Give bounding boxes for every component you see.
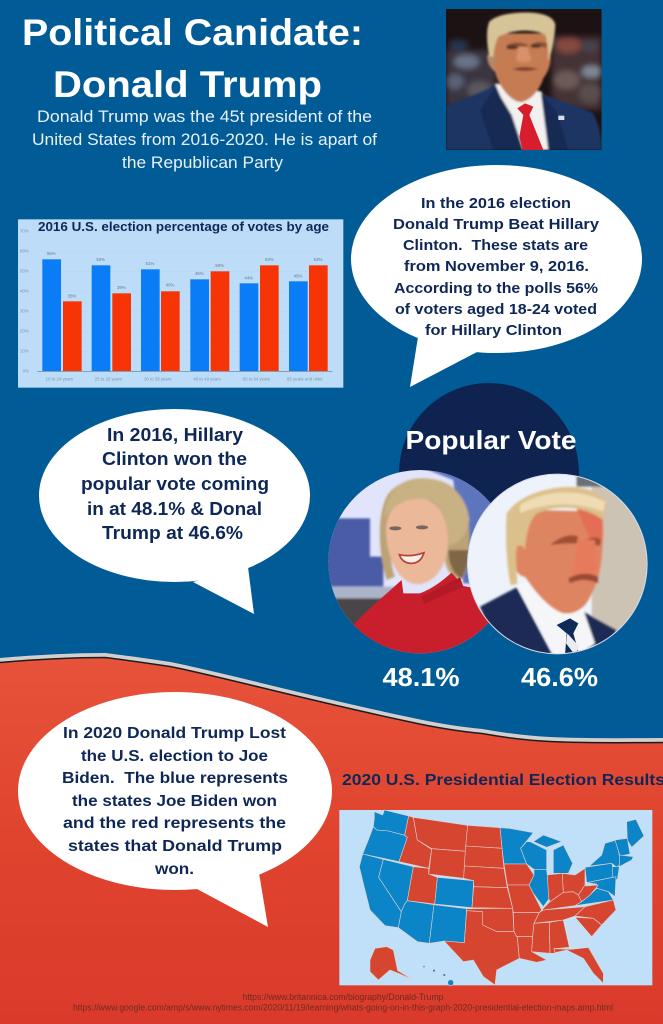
chart axis labels: 60% — [20, 249, 29, 254]
speech bubble: 2020 election: the U.S. election to Joe — [81, 748, 268, 765]
speech bubble: popular vote: In 2016, Hillary — [107, 425, 243, 445]
speech bubble: 2020 election: won. — [154, 861, 194, 878]
map title: 2020 U.S. Presidential Election Results — [342, 772, 663, 789]
speech bubble: 2016 election: from November 9, 2016. — [404, 258, 589, 275]
bar value labels: 50% — [215, 263, 224, 268]
title: Political Canidate: — [22, 12, 363, 53]
bar value labels: 44% — [244, 275, 253, 280]
speech bubble: 2016 election: According to the polls 56% — [394, 280, 598, 297]
speech bubble: 2016 election: for Hillary Clinton — [425, 322, 562, 339]
bar value labels: 39% — [117, 285, 126, 290]
Trump states — [370, 816, 616, 985]
chart axis labels: 30% — [20, 309, 29, 314]
photo: Hillary Clinton — [328, 470, 490, 654]
speech bubble: 2020 election: and the red represents the — [63, 815, 286, 832]
bar value labels: 53% — [96, 257, 105, 262]
photo: Donald Trump portrait — [446, 9, 602, 150]
chart title: 2016 U.S. election percentage of votes by age — [38, 219, 329, 234]
chart axis labels: 30 to 39 years — [144, 377, 171, 382]
title: Donald Trump — [53, 64, 322, 105]
bar value labels: 51% — [146, 261, 154, 266]
speech bubble: 2020 election: Biden. The blue represents — [62, 770, 288, 787]
chart axis labels: 10% — [20, 349, 29, 354]
chart axis labels: 50% — [20, 269, 29, 274]
Georgia, undecided — [563, 917, 592, 949]
photo: Donald Trump closeup — [463, 470, 653, 660]
heading: popular vote: Popular Vote — [406, 425, 576, 455]
speech bubble: 2020 election — [18, 692, 332, 927]
chart axis labels: 50 to 64 years — [243, 377, 270, 382]
chart axis labels: 20% — [20, 329, 29, 334]
sources: https://www.google.com/amp/s/www.nytimes.com/2020/11/19/learning/whats-going-on-in-this-graph-2020-presidential-election-maps.amp.html — [73, 1002, 613, 1012]
speech bubble: 2016 election: Donald Trump Beat Hillary — [393, 216, 600, 233]
intro text: Donald Trump was the 45t president of the — [37, 108, 372, 126]
speech bubble: 2020 election: states that Donald Trump — [68, 838, 282, 855]
bar chart: 2016 votes by age — [18, 219, 343, 388]
wave: red lower background — [0, 655, 663, 1024]
map: 2020 election results — [339, 810, 652, 986]
chart axis labels: 0% — [23, 369, 29, 374]
chart axis labels: 65 years and older — [287, 377, 323, 382]
bar value labels: 45% — [294, 274, 302, 279]
circle: popular vote backdrop — [399, 383, 579, 563]
sources: https://www.britannica.com/biography/Donald-Trump — [242, 992, 444, 1002]
bar value labels — [47, 251, 322, 298]
speech bubble: 2016 election: of voters aged 18-24 voted — [395, 301, 597, 318]
intro text: the Republican Party — [122, 154, 284, 172]
sources — [73, 992, 613, 1012]
chart axis labels: 40% — [20, 289, 29, 294]
stat: Clinton 48.1%: 48.1% — [382, 662, 460, 692]
title — [22, 12, 363, 105]
speech bubble: 2020 election: the states Joe Biden won — [72, 793, 277, 810]
intro text: United States from 2016-2020. He is apart of — [32, 131, 377, 149]
speech bubble: popular vote: Trump at 46.6% — [102, 523, 243, 543]
bar value labels: 53% — [314, 257, 322, 262]
bar value labels: 40% — [166, 283, 174, 288]
chart axis labels: 40 to 49 years — [193, 377, 221, 382]
blue bars — [42, 259, 308, 371]
chart axis labels: 25 to 29 years — [95, 377, 122, 382]
bar value labels: 35% — [68, 293, 76, 298]
chart axis labels: 70% — [20, 229, 29, 234]
speech bubble: popular vote — [39, 409, 310, 614]
stat: Trump 46.6%: 46.6% — [521, 662, 598, 692]
speech bubble: popular vote: in at 48.1% & Donal — [87, 499, 262, 519]
speech bubble: popular vote: popular vote coming — [81, 474, 269, 494]
red bars — [63, 265, 328, 371]
speech bubble: 2016 election: Clinton. These stats are — [403, 237, 588, 254]
speech bubble: 2016 election — [351, 165, 642, 387]
speech bubble: popular vote: Clinton won the — [102, 449, 247, 469]
bar value labels: 56% — [47, 251, 56, 256]
bar value labels: 46% — [195, 271, 204, 276]
intro text — [32, 108, 377, 172]
bar value labels: 53% — [265, 257, 274, 262]
chart axis labels — [20, 229, 323, 382]
Biden states — [359, 810, 644, 986]
chart axis labels: 18 to 24 years — [46, 377, 73, 382]
speech bubble: 2020 election: In 2020 Donald Trump Lost — [63, 725, 287, 742]
speech bubble: 2016 election: In the 2016 election — [421, 195, 571, 212]
